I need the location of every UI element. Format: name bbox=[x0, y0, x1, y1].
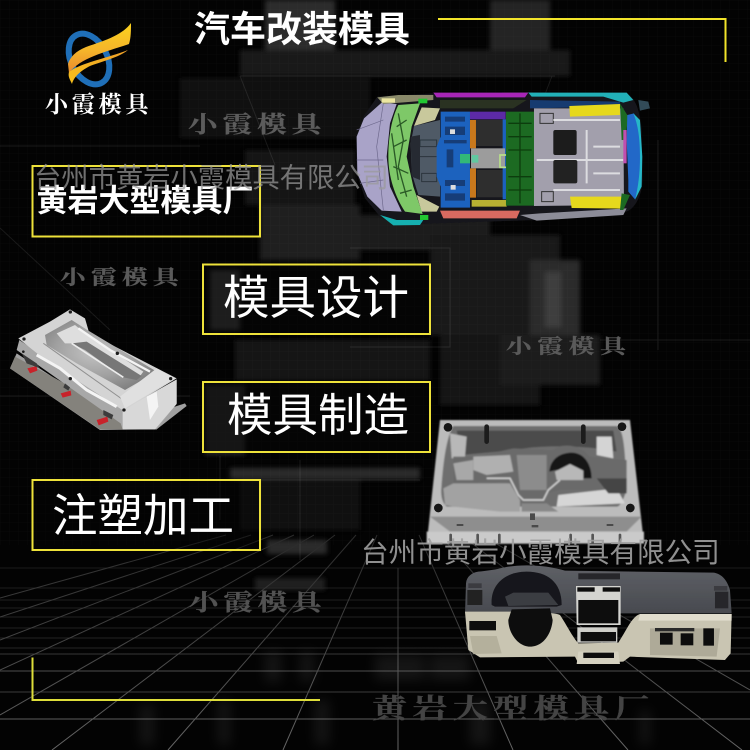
watermark: 小霞模具 left: 小霞模具 bbox=[60, 267, 184, 288]
mold block bbox=[427, 420, 644, 544]
panel: 注塑加工 bbox=[32, 480, 260, 550]
panel: 注塑加工: 注塑加工 bbox=[52, 490, 234, 542]
logo bbox=[45, 23, 152, 117]
watermark: 黄岩大型模具厂 bottom: 黄岩大型模具厂 bbox=[372, 694, 655, 724]
tow point bbox=[638, 100, 650, 111]
binnacle bbox=[492, 572, 562, 607]
lower shelf bbox=[443, 483, 520, 512]
car body CAD model bbox=[356, 92, 650, 225]
icon: gold swoosh upper bbox=[68, 23, 131, 73]
mold side bbox=[17, 340, 177, 429]
icon: gold swoosh lower bbox=[69, 50, 128, 84]
rear bumper bbox=[627, 113, 641, 199]
rear floor bbox=[534, 108, 624, 206]
hood bbox=[357, 103, 402, 212]
cavity core bbox=[453, 446, 627, 503]
instrument panel image bbox=[465, 565, 732, 664]
panel: 模具设计: 模具设计 bbox=[223, 272, 409, 324]
green floor bbox=[506, 112, 534, 206]
panel: 模具设计 bbox=[203, 264, 430, 334]
column opening bbox=[508, 608, 553, 647]
cowl bbox=[414, 107, 440, 126]
upper panel bbox=[465, 565, 732, 613]
side vents bbox=[467, 590, 482, 605]
cavity bbox=[45, 320, 157, 390]
red cylinders bbox=[27, 366, 37, 373]
panel: 模具制造 bbox=[203, 382, 430, 452]
corner bolts bbox=[444, 423, 452, 432]
bottom left bracket bbox=[32, 658, 320, 700]
roof rail strips bbox=[377, 95, 433, 104]
lower panel bbox=[465, 612, 732, 663]
cavity bbox=[441, 426, 627, 507]
logo wordmark: 小霞模具 bbox=[45, 92, 152, 117]
title: 汽车改装模具 bbox=[194, 8, 410, 50]
yellow rear panels bbox=[569, 104, 620, 117]
watermark: company name over mold: 台州市黄岩小霞模具有限公司 bbox=[361, 537, 720, 568]
panel: 黄岩大型模具厂: 黄岩大型模具厂 bbox=[36, 184, 254, 218]
car outline bbox=[356, 92, 643, 225]
background grid texture bbox=[0, 0, 750, 545]
top face bbox=[18, 309, 177, 411]
front band bbox=[430, 517, 642, 532]
panel: 黄岩大型模具厂 bbox=[32, 166, 260, 236]
windshield bbox=[388, 103, 423, 214]
front floor grey bbox=[411, 120, 440, 197]
bumper mold image bbox=[10, 309, 187, 430]
floor reflection glow bbox=[140, 652, 650, 745]
slots bbox=[487, 427, 583, 442]
top right bracket bbox=[438, 19, 726, 62]
watermark: 小霞模具 right: 小霞模具 bbox=[506, 336, 631, 357]
base plate bbox=[10, 353, 187, 430]
lower left cutouts bbox=[469, 621, 496, 630]
rear green bbox=[620, 103, 630, 210]
seat zone bbox=[470, 112, 506, 119]
lower right cutouts bbox=[650, 628, 720, 657]
watermark: company name upper: 台州市黄岩小霞模具有限公司 bbox=[34, 162, 389, 193]
arch opening bbox=[549, 453, 592, 478]
watermark: 小霞模具 upper: 小霞模具 bbox=[188, 111, 326, 137]
edge details bbox=[37, 355, 117, 407]
watermark: 小霞模具 lower: 小霞模具 bbox=[189, 589, 326, 615]
floor grid bbox=[0, 535, 750, 750]
blue floor bbox=[437, 112, 470, 208]
dashboard mold image bbox=[427, 420, 644, 544]
bolt holes bbox=[22, 337, 26, 341]
center stack bbox=[576, 586, 621, 625]
panel: 模具制造: 模具制造 bbox=[227, 390, 409, 441]
icon: blue ring bbox=[60, 27, 118, 91]
